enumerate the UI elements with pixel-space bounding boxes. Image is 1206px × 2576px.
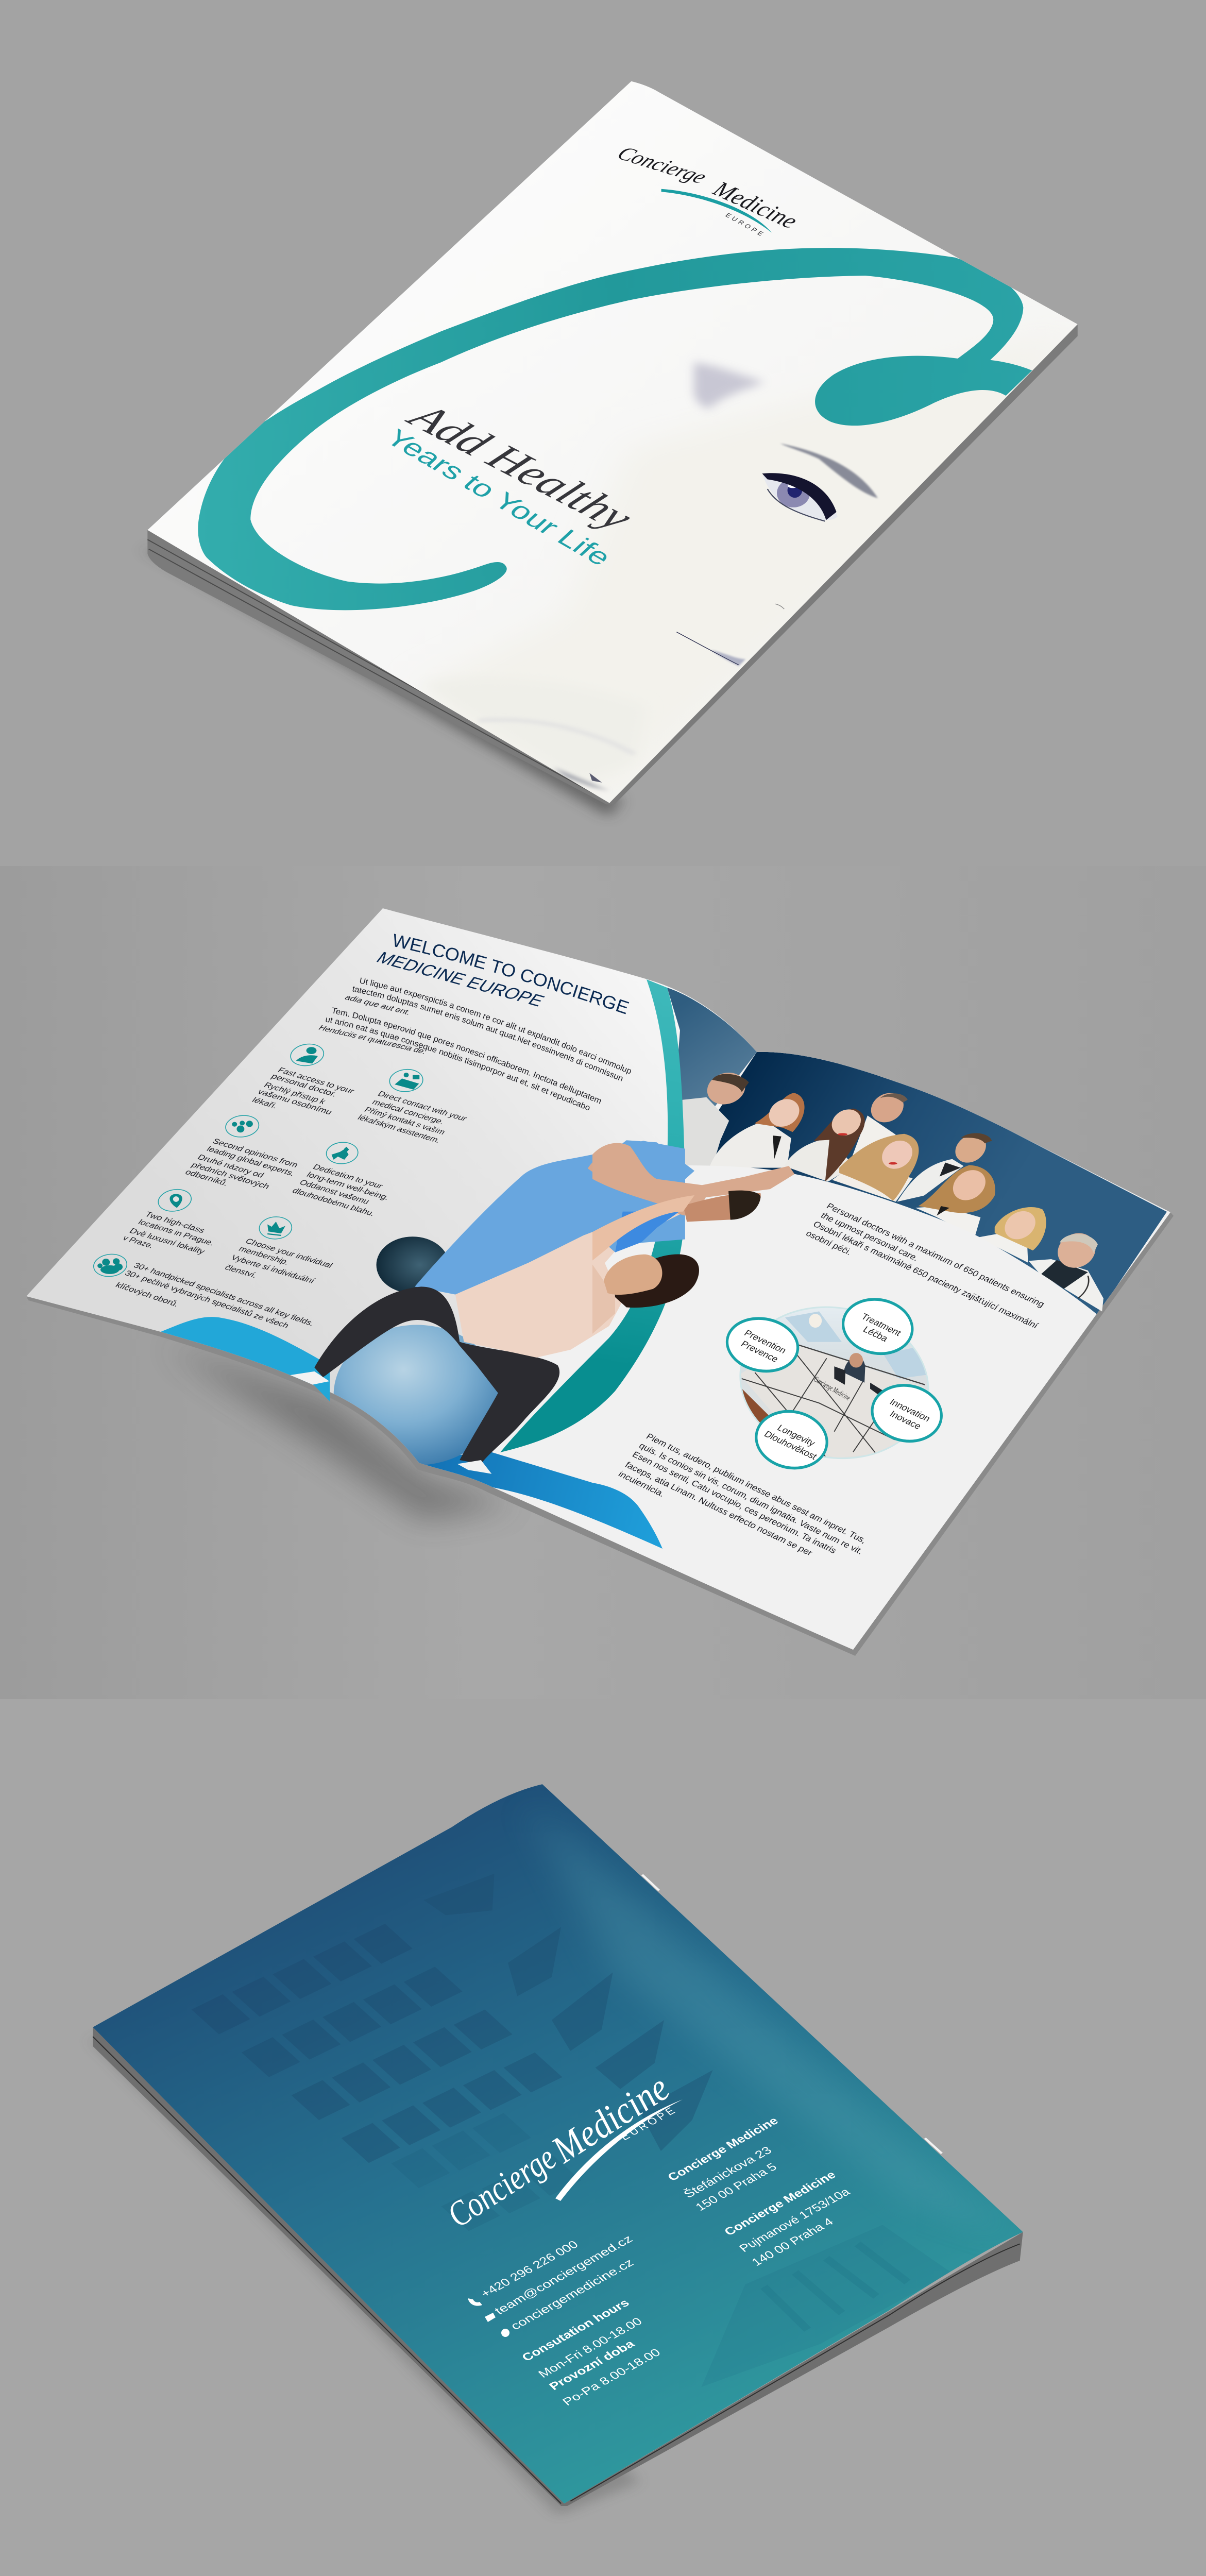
node: innovation bbox=[869, 1381, 945, 1446]
floor bbox=[738, 1385, 785, 1432]
team of doctors bbox=[683, 1071, 1103, 1311]
line: membership. bbox=[237, 1245, 291, 1266]
spine highlight bbox=[526, 1801, 1014, 2239]
address 2 street: Pujmanové 1753/10a bbox=[736, 2185, 853, 2255]
benefit text: locations bbox=[121, 1211, 216, 1256]
pupil bbox=[788, 483, 802, 498]
line: předních světových bbox=[190, 1161, 271, 1191]
intro line 3: adia que aut ent. bbox=[343, 994, 413, 1016]
open spread brochure bbox=[0, 0, 1185, 1700]
right page text: body bbox=[617, 1432, 869, 1557]
Add Healthy: Add Healthy bbox=[397, 395, 644, 538]
header left of fold bbox=[667, 988, 757, 1165]
intro line 6: Henduciis et quaturescia de. bbox=[317, 1024, 428, 1056]
cover wordmark rule bbox=[661, 189, 772, 233]
line: the upmost personal care. bbox=[819, 1211, 921, 1263]
doctor 7 bbox=[915, 1165, 995, 1236]
background: bottom panel bbox=[0, 1699, 1206, 2576]
line: v Praze. bbox=[121, 1234, 156, 1250]
line: Oddanost vašemu bbox=[298, 1179, 371, 1206]
node: treatment bbox=[840, 1295, 915, 1358]
back cover brochure bbox=[77, 1772, 1076, 2535]
cover page stack edge bbox=[147, 324, 1078, 804]
right page bbox=[419, 1052, 1170, 1650]
counter screen bbox=[789, 1342, 925, 1385]
cover logo bbox=[613, 143, 803, 238]
logo: Concierge: Concierge bbox=[439, 2139, 564, 2235]
therapist lower sleeve bbox=[615, 1212, 680, 1252]
address 1 street: Štefánickova 23 bbox=[681, 2144, 774, 2200]
line: Dvě luxusní lokality bbox=[128, 1227, 207, 1256]
diagram ring bbox=[730, 1293, 938, 1472]
circle diagram bbox=[724, 1293, 945, 1473]
doctor 1 bbox=[683, 1071, 750, 1168]
teal curved band bbox=[500, 979, 685, 1452]
logo: Europe: EUROPE bbox=[618, 2106, 677, 2143]
label: Longevity: Longevity bbox=[775, 1423, 817, 1448]
front cover brochure bbox=[141, 81, 1078, 817]
icon: concierge desk bbox=[388, 1068, 424, 1093]
intro line 5: ut arion eat as quae conseque nobitis tisimporpor aut et, sit et repudicabo. bbox=[0, 0, 591, 1113]
contact details bbox=[478, 2233, 663, 2408]
address 1 name: Concierge Medicine bbox=[665, 2114, 781, 2183]
therapist arm bbox=[592, 1143, 794, 1212]
hair tuft bbox=[694, 363, 765, 409]
patient top bbox=[455, 1196, 685, 1358]
label: Dlouhovekost: Dlouhověkost bbox=[762, 1429, 819, 1462]
back cover shadow bbox=[90, 2039, 639, 2516]
line: Piem tus, audero, publium inesse abus sest am inpret. Tus, bbox=[644, 1432, 869, 1545]
lips line bbox=[676, 632, 739, 665]
benefit text: second opinions bbox=[183, 1138, 300, 1191]
benefit icons bbox=[92, 1042, 424, 1278]
icon: globe bbox=[501, 2329, 509, 2337]
intro line 2: tatectem doluptas sumet enis solum aut quat.Net eossinvenis di comnissunt bbox=[352, 986, 623, 1081]
clinic photo bbox=[736, 1301, 936, 1464]
benefit text: specialists bbox=[114, 1262, 316, 1330]
large gym ball bbox=[334, 1325, 500, 1465]
eye white bbox=[763, 474, 838, 520]
line: dlouhodobému blahu. bbox=[291, 1187, 377, 1218]
line: Dedication to your bbox=[311, 1163, 385, 1191]
shoe right bbox=[457, 1460, 491, 1474]
doctor 5 bbox=[832, 1134, 919, 1202]
background: middle panel bbox=[0, 866, 1206, 1699]
line: Fast access to your bbox=[276, 1066, 356, 1095]
pendant lamp bbox=[809, 1314, 822, 1328]
line: lékaři. bbox=[250, 1096, 279, 1110]
receptionist bbox=[844, 1357, 865, 1383]
hours cz: Po-Pa 8.00-18.00 bbox=[559, 2346, 663, 2408]
icon: location pin bbox=[156, 1187, 193, 1214]
line: Druhé názory od bbox=[196, 1154, 266, 1179]
intro line 1: Ut lique aut experspictis a conem re cor alit ut explandit dolo earci ommolup bbox=[360, 978, 631, 1075]
building windows bbox=[192, 1924, 562, 2163]
hours cz heading: Provozní doba bbox=[546, 2337, 637, 2393]
label: Prevention: Prevention bbox=[742, 1328, 788, 1355]
label: Prevence: Prevence bbox=[739, 1339, 780, 1364]
icon: crown membership bbox=[259, 1216, 293, 1240]
monitor bbox=[834, 1366, 884, 1397]
cover page bbox=[147, 81, 1078, 803]
line: Second opinions from bbox=[211, 1138, 300, 1169]
address 1 city: 150 00 Praha 5 bbox=[692, 2161, 779, 2213]
line: Choose your individual bbox=[244, 1238, 334, 1269]
icon: doctor bbox=[288, 1042, 326, 1068]
shoe left bbox=[289, 1371, 329, 1385]
line: 30+ pečlivě vybraných specialistů ze všech bbox=[123, 1269, 291, 1330]
label: Innovation: Innovation bbox=[888, 1397, 932, 1423]
lip shade bbox=[711, 650, 745, 666]
addresses bbox=[665, 2114, 853, 2268]
patient face bbox=[604, 1255, 662, 1295]
label: Lecba: Léčba bbox=[861, 1325, 890, 1344]
line: odborníků. bbox=[183, 1168, 230, 1188]
web: conciergemedicine.cz bbox=[507, 2257, 636, 2332]
swoosh C shape bbox=[198, 248, 1032, 610]
node: longevity bbox=[753, 1406, 830, 1473]
lower building windows bbox=[391, 2113, 581, 2231]
therapist shirt right part bbox=[592, 1140, 694, 1252]
patient arm bbox=[592, 1195, 694, 1261]
iris bbox=[777, 479, 810, 507]
address 2 city: 140 00 Praha 4 bbox=[749, 2215, 836, 2268]
blue corner left bbox=[161, 1317, 330, 1401]
line: Vyberte si individuální bbox=[229, 1254, 317, 1285]
stack lines bbox=[93, 2037, 1020, 2503]
line: faceps, atia Linam. Nultuss erfecto nostam se per bbox=[623, 1460, 814, 1557]
patient leggings bbox=[314, 1286, 559, 1464]
line: vašemu osobnímu bbox=[256, 1088, 334, 1116]
heading line 2: MEDICINE EUROPE bbox=[372, 948, 548, 1010]
doctor 8 bbox=[978, 1207, 1046, 1263]
spread shadow bbox=[165, 1345, 515, 1520]
face photo shading bbox=[198, 248, 1065, 801]
line: členství. bbox=[223, 1264, 259, 1280]
intro paragraphs bbox=[0, 0, 633, 1113]
line: Rychlý přístup k bbox=[262, 1081, 327, 1106]
logo: Concierge: Concierge bbox=[613, 143, 711, 188]
photo: fitness patient and therapist bbox=[289, 1140, 794, 1474]
left page bbox=[26, 908, 757, 1463]
line: Direct contact with your bbox=[376, 1090, 469, 1123]
patient hair bbox=[615, 1255, 699, 1308]
back cover page stack bbox=[93, 2027, 1023, 2506]
icon: phone bbox=[468, 2298, 482, 2306]
lower right building bbox=[702, 2225, 951, 2387]
line: Esen nos senti, Catu vocupio, ces pereorium. Ta inatris bbox=[631, 1450, 838, 1555]
building roofs bbox=[423, 1874, 713, 2151]
page thickness bbox=[26, 1212, 1174, 1656]
icon: specialists group bbox=[92, 1252, 128, 1278]
benefit text: long-term bbox=[291, 1163, 391, 1218]
logo: Medicine: Medicine bbox=[543, 2066, 677, 2171]
small dark ball bbox=[377, 1236, 449, 1293]
therapist head bbox=[683, 1193, 761, 1222]
doctor 6 bbox=[897, 1132, 992, 1202]
face features: hair, eye, eyebrow, nose, lips bbox=[676, 363, 878, 666]
line: incuiernicia. bbox=[617, 1469, 667, 1499]
hours en: Mon-Fri 8.00-18.00 bbox=[535, 2315, 645, 2380]
doctor 2 bbox=[709, 1093, 805, 1168]
heading line 1: WELCOME TO CONCIERGE bbox=[394, 934, 630, 1014]
doctor 4 bbox=[851, 1091, 908, 1161]
navy header band bbox=[670, 1052, 1167, 1319]
page stack lines bbox=[147, 539, 608, 801]
back logo underline bbox=[555, 2099, 683, 2201]
welcome heading bbox=[372, 930, 632, 1019]
diagram labels bbox=[739, 1312, 932, 1462]
line: medical concierge. bbox=[370, 1098, 446, 1126]
eye highlight bbox=[788, 483, 798, 488]
line: Personal doctors with a maximum of 650 patients ensuring bbox=[825, 1201, 1046, 1309]
windows bbox=[785, 1311, 929, 1379]
icon: well-being bbox=[326, 1141, 359, 1165]
line: lékařským asistentem. bbox=[356, 1114, 442, 1145]
label: Inovace: Inovace bbox=[888, 1409, 923, 1431]
logo: Medicine: Medicine bbox=[708, 176, 803, 233]
line: locations in Prague. bbox=[137, 1218, 216, 1247]
back logo text bbox=[439, 2066, 677, 2235]
line: personal doctor. bbox=[269, 1073, 339, 1098]
therapist hair bbox=[728, 1191, 760, 1219]
line: 30+ handpicked specialists across all key fields. bbox=[132, 1262, 316, 1328]
line: quis. Is conios sin vis, corum, dium ignatia. Vaste num re vit. bbox=[637, 1441, 865, 1556]
doctor 3 bbox=[784, 1108, 865, 1182]
desk logo: Concierge Medicine bbox=[812, 1375, 852, 1403]
line: leading global experts. bbox=[205, 1145, 297, 1178]
background: top panel bbox=[0, 0, 1206, 866]
icon: envelope bbox=[485, 2313, 496, 2322]
blue corner right bbox=[419, 1450, 663, 1549]
contact icons bbox=[468, 2298, 509, 2337]
therapist trousers and shirt bbox=[415, 1141, 685, 1295]
desk joints bbox=[742, 1354, 895, 1458]
cover shadow bbox=[141, 548, 622, 817]
stitch marks bbox=[642, 1875, 942, 2154]
patient torso right bbox=[592, 1264, 615, 1334]
label: Treatment: Treatment bbox=[859, 1312, 903, 1338]
therapist arm upper bbox=[588, 1149, 685, 1216]
right page text: doctors bbox=[804, 1201, 1046, 1330]
intro line 4: Tem. Dolupta eperovid que pores nonesci officaborem. Inctota delluptatem bbox=[332, 1007, 601, 1104]
line: Osobní lékaři s maximálně 650 pacienty zajišťující maximální bbox=[811, 1219, 1040, 1330]
email: team@conciergemed.cz bbox=[491, 2233, 635, 2317]
eyelash bbox=[762, 473, 837, 520]
line: Two high-class bbox=[143, 1211, 207, 1235]
logo: Europe: EUROPE bbox=[724, 212, 765, 238]
doctor 9 bbox=[1029, 1232, 1103, 1311]
node: prevention bbox=[724, 1314, 801, 1376]
address 2 name: Concierge Medicine bbox=[721, 2168, 839, 2238]
Years to Your Life: Years to Your Life bbox=[379, 425, 618, 571]
line: long-term well-being. bbox=[305, 1171, 391, 1202]
phone: +420 296 226 000 bbox=[478, 2238, 581, 2300]
nose bbox=[775, 604, 784, 609]
benefit text: personal doctor bbox=[250, 1066, 356, 1116]
back cover surface bbox=[77, 1772, 1076, 2535]
reception desk bbox=[740, 1342, 925, 1458]
line: Přímý kontakt s vaším bbox=[363, 1106, 447, 1137]
benefit text: concierge bbox=[356, 1090, 469, 1145]
line: osobní péči. bbox=[804, 1229, 854, 1257]
line: klíčových oborů. bbox=[114, 1281, 181, 1309]
hours heading: Consutation hours bbox=[519, 2297, 632, 2364]
white panel under header bbox=[464, 1165, 1185, 1700]
benefit text: membership bbox=[223, 1238, 334, 1285]
eyebrow bbox=[780, 444, 878, 498]
cover headline bbox=[379, 395, 644, 571]
icon: global experts bbox=[224, 1113, 260, 1139]
lower lid bbox=[768, 489, 825, 521]
